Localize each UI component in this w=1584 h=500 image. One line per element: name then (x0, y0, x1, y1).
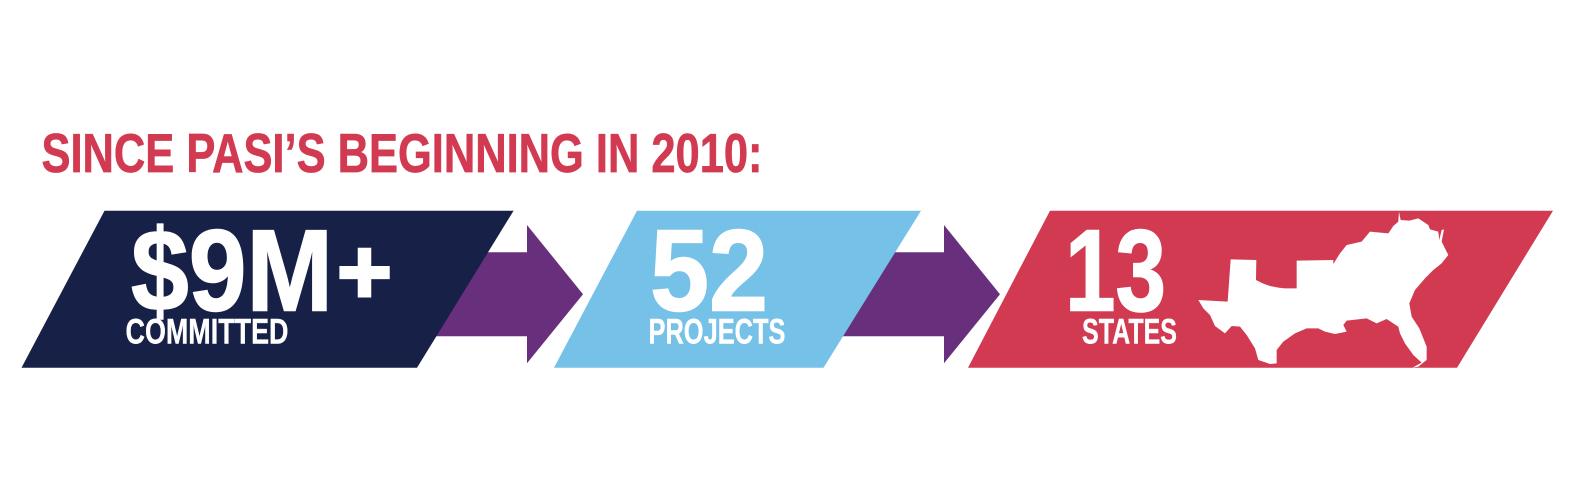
label: projects: PROJECTS (648, 312, 786, 352)
stat: thirteen: 13 (1065, 206, 1166, 336)
title: SINCE PASI’S BEGINNING IN 2010: (42, 122, 762, 184)
panel: states (968, 206, 1553, 368)
stat: fifty-two: 52 (650, 206, 768, 336)
panel: committed funding (22, 206, 514, 368)
label: states: STATES (1082, 312, 1177, 352)
arrow: first purple arrow (425, 225, 583, 363)
label: committed: COMMITTED (126, 312, 288, 352)
arrow: second purple arrow (842, 225, 1000, 363)
icon: map of southern US states (1198, 212, 1448, 368)
stat: nine million plus: $9M (131, 206, 333, 336)
plus sign: + (337, 221, 392, 323)
panel: projects (554, 206, 921, 368)
